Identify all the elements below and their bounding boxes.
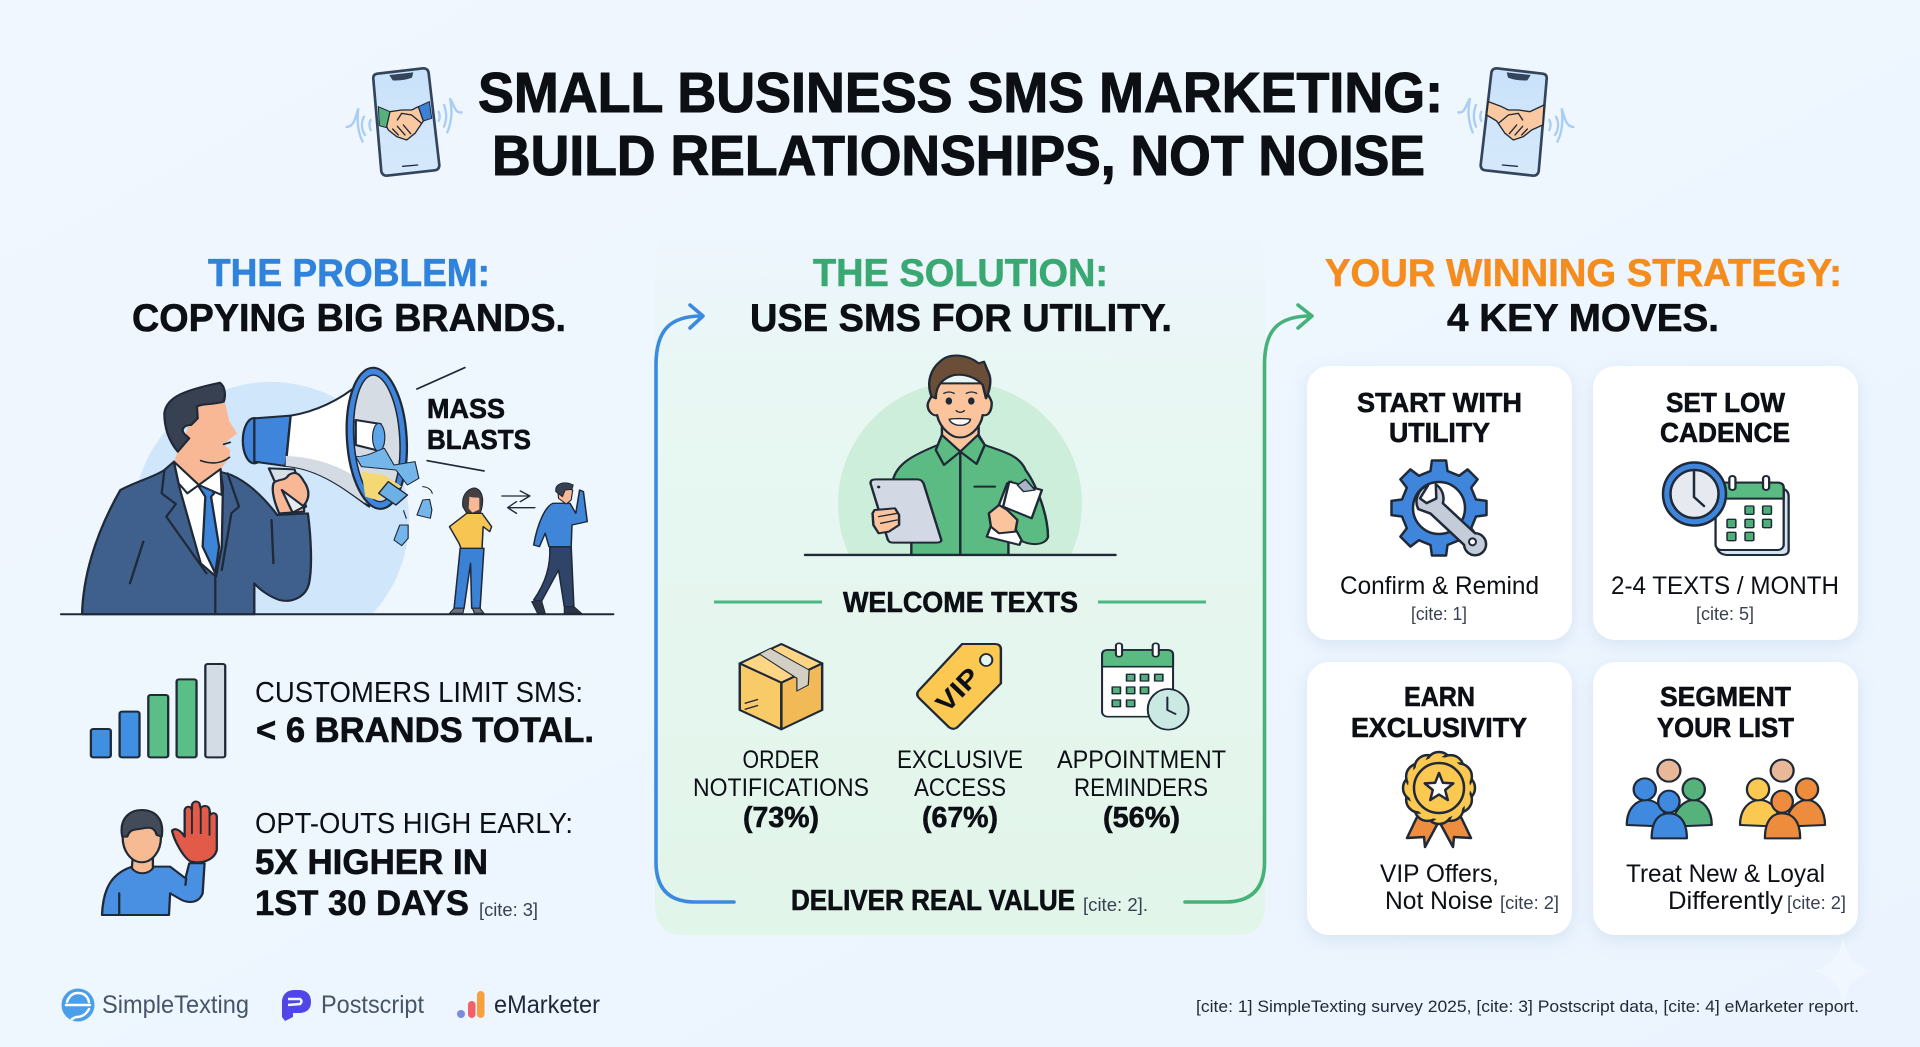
item: appointment reminders: APPOINTMENT <box>1057 746 1226 774</box>
card: earn exclusivity: VIP Offers, <box>1380 860 1499 888</box>
card: start with utility: [cite: 1] <box>1411 604 1467 624</box>
item: order notifications: NOTIFICATIONS <box>693 774 869 802</box>
logo: simpletexting: SimpleTexting <box>102 991 249 1019</box>
caption: deliver real value: DELIVER REAL VALUE <box>791 885 1075 917</box>
heading: the solution: THE SOLUTION: <box>813 252 1108 295</box>
logo: emarketer: eMarketer <box>494 991 600 1019</box>
card: set low cadence: SET LOW <box>1666 387 1786 418</box>
heading: winning strategy: 4 KEY MOVES. <box>1447 297 1719 340</box>
icon: vip tag: VIP <box>929 661 986 718</box>
item: appointment reminders <box>1057 643 1226 834</box>
heading: winning strategy: YOUR WINNING STRATEGY: <box>1325 252 1842 295</box>
stat: customers limit sms: CUSTOMERS LIMIT SMS: <box>255 677 583 709</box>
panel: solution background <box>655 230 1265 935</box>
card: segment your list: YOUR LIST <box>1657 712 1794 743</box>
icon: two customer groups <box>1627 760 1825 838</box>
card: earn exclusivity: EARN <box>1404 681 1475 712</box>
item: exclusive access: (67%) <box>922 802 998 834</box>
item: exclusive access <box>897 644 1023 834</box>
stat: customers limit sms: < 6 BRANDS TOTAL. <box>256 711 594 750</box>
icon: clock and calendar <box>1663 462 1789 555</box>
item: order notifications <box>693 644 869 834</box>
item: order notifications: (73%) <box>743 802 819 834</box>
heading: winning strategy <box>1325 252 1842 340</box>
icon: bar chart <box>91 664 225 757</box>
card: segment your list: Differently <box>1668 887 1784 915</box>
card: set low cadence: [cite: 5] <box>1696 604 1754 624</box>
card: start with utility <box>1307 366 1572 640</box>
label: mass blasts: BLASTS <box>427 424 531 455</box>
footnote: citations: [cite: 1] SimpleTexting survey 2025, [cite: 3] Postscript data, [cite: 4] eMarketer report. <box>1196 997 1859 1016</box>
label: mass blasts: MASS <box>427 393 505 424</box>
card: segment your list: SEGMENT <box>1660 681 1791 712</box>
item: exclusive access: ACCESS <box>914 774 1006 802</box>
item: exclusive access: EXCLUSIVE <box>897 746 1023 774</box>
card: start with utility: UTILITY <box>1389 417 1490 448</box>
illustration: smiling worker with tablet and clipboard <box>804 354 1117 556</box>
item: appointment reminders: (56%) <box>1103 802 1180 834</box>
icon: medal badge <box>1403 752 1475 847</box>
logo: postscript <box>282 990 424 1021</box>
title: SMALL BUSINESS SMS MARKETING: <box>478 61 1443 125</box>
caption: deliver real value: [cite: 2]. <box>1083 895 1148 915</box>
label: mass blasts <box>427 393 531 455</box>
card: earn exclusivity: Not Noise <box>1385 887 1493 915</box>
card: earn exclusivity: [cite: 2] <box>1500 893 1559 913</box>
card: set low cadence <box>1593 366 1858 640</box>
card: earn exclusivity <box>1307 662 1572 935</box>
item: appointment reminders: REMINDERS <box>1074 774 1208 802</box>
card: set low cadence: 2-4 TEXTS / MONTH <box>1611 572 1839 600</box>
illustration: mass blasts megaphone <box>60 366 614 616</box>
stat: opt-outs high early <box>102 802 573 923</box>
icon: package box <box>740 644 822 729</box>
card: earn exclusivity: EXCLUSIVITY <box>1351 712 1527 743</box>
heading: welcome texts: WELCOME TEXTS <box>843 587 1078 619</box>
item: order notifications: ORDER <box>742 746 820 774</box>
stat: opt-outs high early: [cite: 3] <box>479 900 538 920</box>
logo: simpletexting <box>62 988 249 1022</box>
card: segment your list: [cite: 2] <box>1787 893 1846 913</box>
heading: the solution: USE SMS FOR UTILITY. <box>750 297 1172 340</box>
icon: person raising stop hand <box>102 802 217 915</box>
title: BUILD RELATIONSHIPS, NOT NOISE <box>492 124 1425 188</box>
arrow: solution to strategy <box>1185 305 1312 902</box>
icon: phone handshake left <box>347 68 462 176</box>
title <box>478 61 1443 188</box>
icon: vip tag <box>917 644 1001 729</box>
card: start with utility: START WITH <box>1357 387 1522 418</box>
heading: the solution <box>750 252 1172 340</box>
stat: customers limit sms <box>91 664 594 757</box>
card: start with utility: Confirm & Remind <box>1340 572 1539 600</box>
stat: opt-outs high early: 1ST 30 DAYS <box>255 884 469 923</box>
logo: postscript: Postscript <box>321 991 424 1019</box>
card: segment your list <box>1593 662 1858 935</box>
card: set low cadence: CADENCE <box>1660 417 1790 448</box>
icon: phone handshake right <box>1458 68 1573 176</box>
card: segment your list: Treat New & Loyal <box>1626 860 1825 888</box>
heading: the problem <box>132 252 566 340</box>
heading: the problem: COPYING BIG BRANDS. <box>132 297 566 340</box>
heading: the problem: THE PROBLEM: <box>208 252 490 295</box>
arrow: problem to solution <box>656 305 734 902</box>
icon: calendar with clock <box>1102 643 1189 730</box>
icon: sparkle watermark <box>1813 938 1873 1004</box>
stat: opt-outs high early: OPT-OUTS HIGH EARLY: <box>255 808 573 840</box>
icon: gear and wrench <box>1392 460 1495 561</box>
stat: opt-outs high early: 5X HIGHER IN <box>255 843 488 882</box>
